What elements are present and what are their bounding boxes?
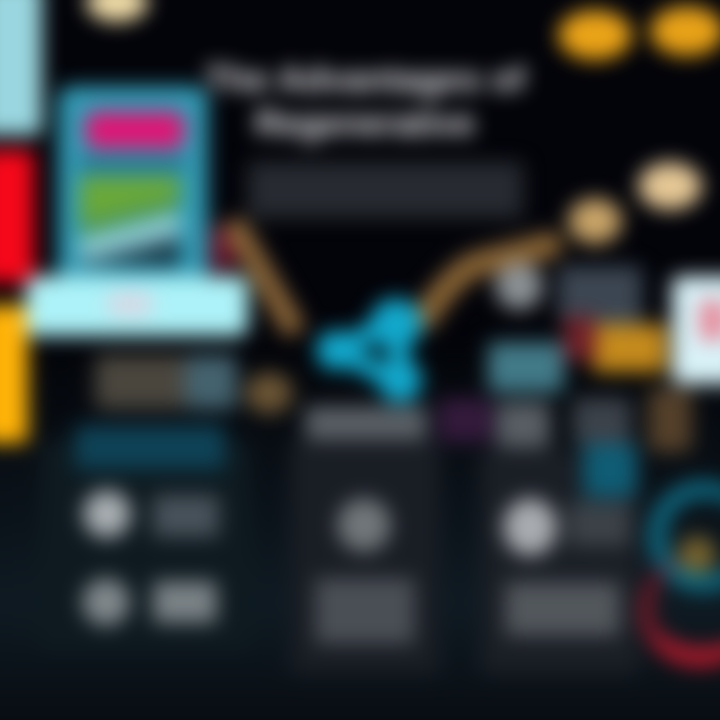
left icon row 1 [83,490,131,538]
coin: top left [86,0,148,22]
left column heading block teal [185,355,237,409]
coin: small [568,198,622,244]
card accent [700,300,720,340]
small block: purple [438,398,492,442]
small tan dot [678,536,716,574]
small block: grey [573,398,631,444]
background lower gradient [0,350,720,720]
middle column heading [305,406,427,440]
small tan block [245,372,293,414]
chart cluster: red block [564,316,596,360]
right text [505,582,620,636]
left label row 2 [153,581,217,623]
edge card: red [0,150,34,282]
chart cluster: orange block [592,324,666,372]
chart cluster: pale node [495,262,543,310]
edge card: yellow [0,305,28,443]
diagonal arrow: left [221,215,307,339]
right icon [503,498,557,556]
chart cluster: slate block [558,266,642,324]
left column heading blocks [95,355,185,409]
column panel: left [40,440,250,650]
column panel: middle [290,440,440,675]
middle text [315,578,415,644]
teal block: right [583,443,637,497]
title heading: The Advantages of [205,60,525,99]
chart cluster: teal block [488,342,564,392]
left icon row 2 [82,578,130,626]
edge card: light blue [0,0,42,135]
column panel: right [480,450,640,675]
coin: top right 1 [558,10,632,60]
phone chart [80,176,180,266]
title heading [194,52,538,156]
coin: mid right [638,162,702,210]
small block: brown [648,388,692,452]
coin: top right 2 [650,6,720,56]
icon: network share [301,283,437,416]
left label row 1 [153,495,219,537]
phone base platform [26,276,248,336]
small block: pale [496,402,550,448]
teal row left [75,425,225,469]
phone side accent [210,225,234,270]
subtitle text block [248,162,523,218]
phone inner dark strip [80,158,184,170]
base accent [108,292,152,316]
diagonal arrow: right rising [404,218,576,341]
title heading: Regenerative [255,104,475,143]
right edge white card [672,276,720,384]
donut arc: red [640,555,720,667]
middle icon [337,498,391,552]
phone illustration [58,86,208,294]
icon: teal ring [648,480,720,592]
phone header pill [86,112,184,148]
right label [568,502,630,546]
